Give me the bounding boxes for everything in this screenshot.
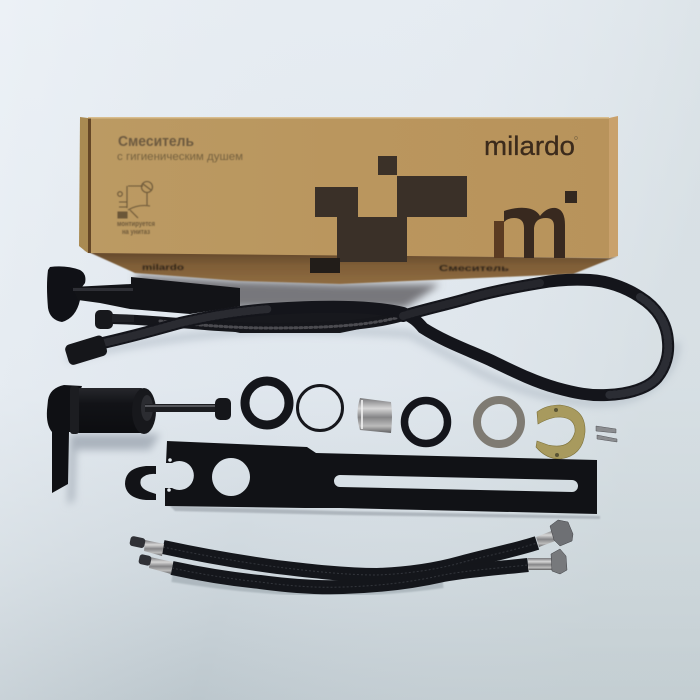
c-clip <box>125 466 156 500</box>
hose shadow <box>172 578 443 592</box>
hose nut <box>95 310 134 329</box>
shower hose <box>70 280 676 403</box>
mounting bracket plate <box>165 441 597 514</box>
mixer shadow <box>68 434 160 505</box>
box title: Смеситель <box>118 134 194 150</box>
main loop strand <box>103 280 668 395</box>
mixer collar <box>132 388 156 434</box>
hygienic shower head <box>47 266 240 322</box>
icon: toilet mounting pictogram <box>118 182 152 218</box>
right hose fittings <box>528 520 573 574</box>
box subtitle: с гигиеническим душем <box>117 151 243 163</box>
m logo <box>494 191 577 258</box>
screws <box>596 426 617 442</box>
bracket shadow <box>170 506 600 519</box>
shower stem <box>72 277 240 314</box>
hose bundle filler <box>190 304 403 333</box>
mixer body <box>47 385 231 493</box>
braided supply hoses <box>163 543 537 592</box>
mixer knob <box>215 398 231 420</box>
cardboard box <box>79 116 618 284</box>
mixer lever <box>47 385 82 493</box>
cardboard box: Смеситель <box>439 264 509 273</box>
pixel block graphic <box>310 156 467 273</box>
hose shadow <box>70 330 676 403</box>
black gasket <box>404 400 448 444</box>
bracket holes <box>167 458 172 492</box>
chrome bushing <box>358 398 392 433</box>
box left flap <box>79 117 88 253</box>
mixer cylinder <box>76 388 144 433</box>
box front face <box>88 117 609 258</box>
supply hose 2 <box>172 565 528 587</box>
underside print: milardo <box>142 263 184 272</box>
mixer rod <box>145 404 216 412</box>
o-ring <box>298 386 342 430</box>
box underside <box>84 250 618 284</box>
cardboard box: на унитаз <box>122 229 150 236</box>
trademark dot <box>575 137 577 139</box>
metal washer <box>477 400 521 444</box>
left hose fittings <box>129 536 173 574</box>
brand wordmark: milardo <box>484 131 575 161</box>
mounting note: монтируется <box>117 221 155 228</box>
hose end fitting <box>64 334 108 366</box>
supply hose 1 <box>163 543 537 575</box>
box right flap <box>609 116 618 258</box>
rubber washer <box>245 381 289 425</box>
brass c-plate <box>536 405 585 459</box>
strand to shower nut <box>112 316 403 328</box>
shadow under box <box>135 275 440 308</box>
